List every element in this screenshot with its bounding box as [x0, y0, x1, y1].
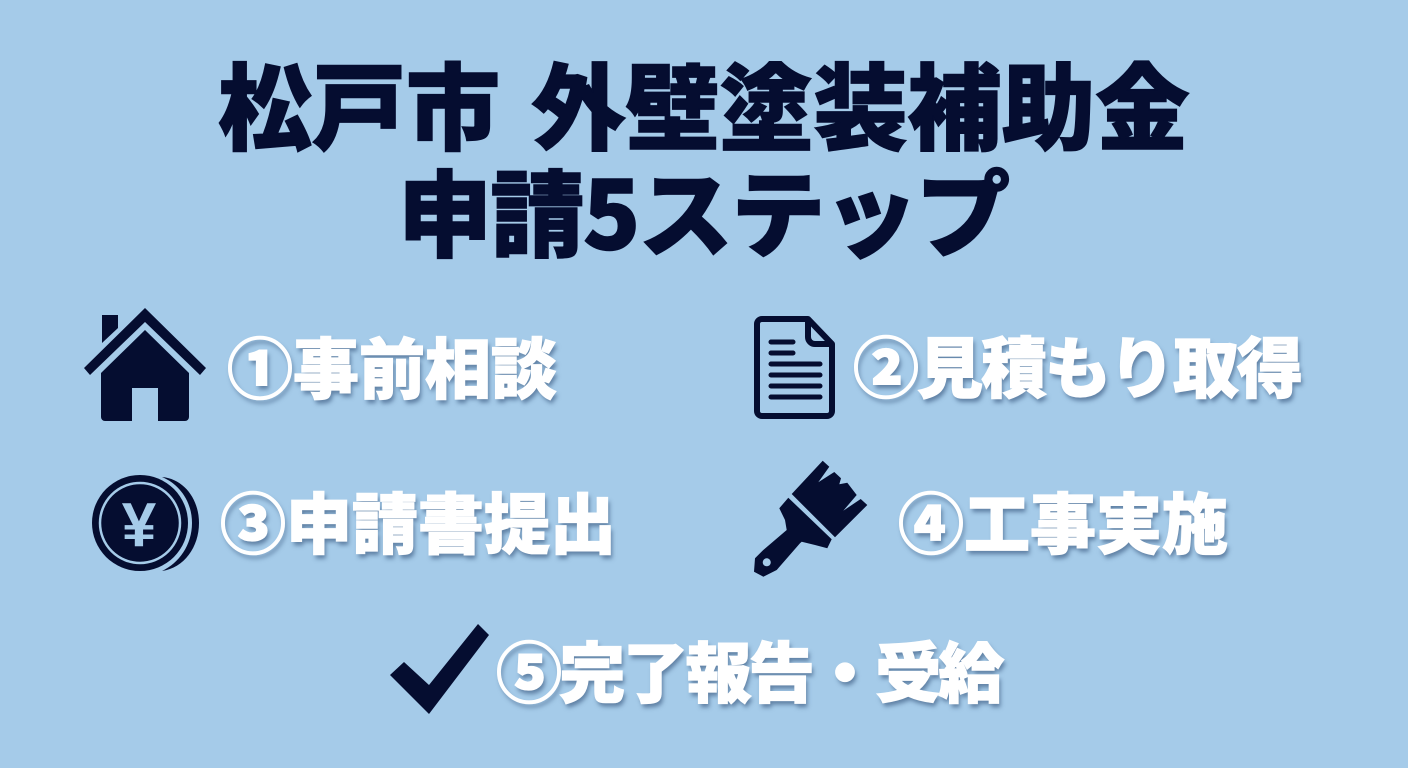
- step 5 label: ⑤完了報告・受給: [496, 621, 1002, 717]
- icon: check mark: [390, 624, 489, 714]
- step 1: consultation: [84, 308, 559, 421]
- title line 2: 申請5ステップ: [398, 141, 1009, 277]
- step 5: completion report: [390, 621, 1008, 717]
- step 3 label: ③申請書提出: [220, 472, 616, 568]
- icon: yen coin: [92, 475, 199, 571]
- icon: house: [84, 308, 206, 421]
- step 1 label: ①事前相談: [227, 317, 557, 413]
- step 4: construction: [754, 460, 1231, 577]
- title line 1: 松戸市 外壁塗装補助金: [218, 34, 1190, 170]
- step 2: quotation: [754, 316, 1305, 419]
- step 2 label: ②見積もり取得: [853, 316, 1301, 412]
- icon: paint brush: [754, 460, 868, 577]
- step 3: application: [92, 472, 616, 571]
- icon: yen coin: ¥: [122, 491, 157, 560]
- step 4 label: ④工事実施: [898, 472, 1228, 568]
- icon: document: [754, 316, 835, 419]
